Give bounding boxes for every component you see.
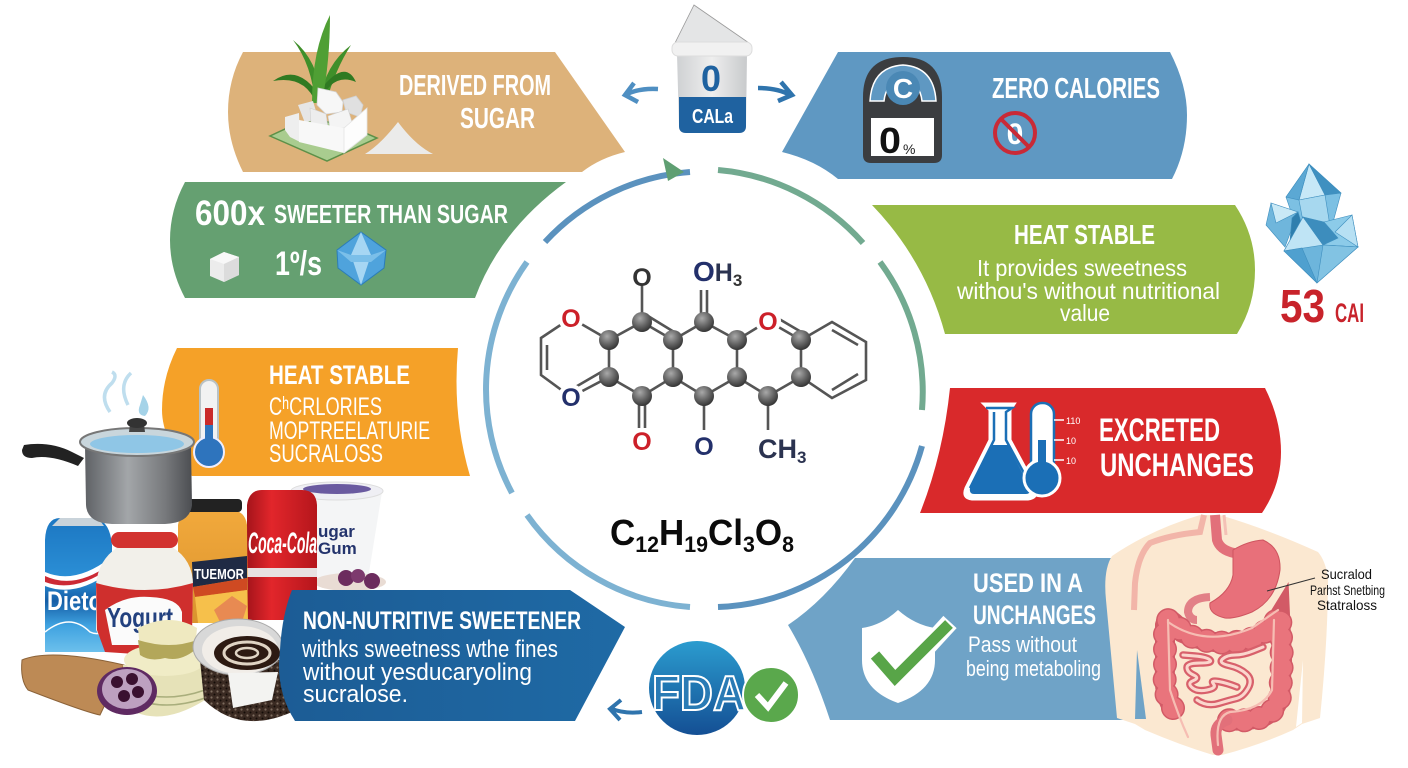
heat stable text block: CʰCRLORIES [269,393,382,421]
passion fruit [97,667,157,715]
text block: non-nutritive body: sucralose. [303,681,408,708]
heading: non-nutritive sweetener: NON-NUTRITIVE SWEETENER [303,607,581,635]
heading: 600x sweeter: 600x [195,194,265,233]
jar: sauce: TUEMOR [194,566,244,583]
chemical structure: O [632,264,652,292]
chemical formula: Cl [708,512,743,553]
chemical formula: H [659,512,684,553]
icon: ice crystals [1266,164,1358,283]
ratio text: 1º/s [275,245,322,283]
panel: non-nutritive sweetener [279,590,625,721]
stomach [1210,540,1280,618]
can: dieto [45,518,112,652]
text block: non-nutritive body: without yesducaryoling [302,659,532,686]
large intestine [1165,610,1282,750]
arrow: to zero calories [758,82,792,101]
text block: pass without: Pass without [968,632,1077,657]
text block: sweetness: It provides sweetness [977,255,1187,281]
chemical formula: 8 [782,532,794,557]
anatomy label [1310,566,1385,613]
text block: sweetness [956,255,1220,326]
can: dieto: Dieto [47,586,102,616]
callout: 53 cal: 53 [1280,280,1325,332]
icon: flask and thermometer: 10 [1066,436,1076,446]
heading: excreted unchanges: EXCRETED [1099,412,1220,448]
text block: non-nutritive body [301,636,558,708]
heading: used in a [973,568,1096,630]
icon: no-calorie sign [995,113,1035,153]
panel: used in a unchanges [788,558,1148,720]
chemical structure: O [694,433,714,461]
tub: sugar gum: ugar [318,522,355,541]
icon: calorie gauge: 0 [879,120,901,161]
icon: FDA badge: FDA [652,667,746,721]
leader line [1267,578,1315,591]
panel: zero calories [782,52,1187,179]
chemical structure: O [561,384,581,412]
chemical structure: O [758,308,778,336]
chemical formula: 12 [635,532,659,557]
heading: heat stable: HEAT STABLE [1014,219,1155,250]
heading: used in a: UNCHANGES [973,600,1096,630]
anatomy label: Statraloss [1317,597,1377,613]
chemical formula: O [755,512,782,553]
icon: calorie gauge [863,57,942,163]
heat stable text block: SUCRALOSS [269,440,383,468]
text block: non-nutritive body: withks sweetness wthe fines [301,636,558,663]
icon: FDA badge [610,641,799,735]
text block: pass without: being metaboling [966,656,1101,681]
icon: sugar plant and cubes [270,15,433,161]
panel: derived from sugar [228,15,625,172]
callout: 53 cal: CAI [1335,298,1364,328]
icon: calorie gauge: C [893,73,913,104]
chemical formula: C [610,512,636,553]
arrow head on ring [663,158,684,181]
panel: heat stable green [872,205,1255,334]
panel: 600x sweeter than sugar [170,182,566,298]
heading: used in a: USED IN A [973,568,1083,598]
panel: heat stable orange [162,348,470,476]
icon: flask and thermometer: 10 [1066,456,1076,466]
tub: sugar gum: Gum [318,539,357,558]
heading: derived from sugar: DERIVED FROM [399,70,551,102]
heading: derived from sugar [399,70,551,135]
heat stable heading: HEAT STABLE [269,360,410,390]
icon: sugar cup with arrows: 0 [701,58,721,99]
icon: blue diamond [337,232,386,285]
icon: sugar cube [210,252,239,282]
panel: excreted unchanges [920,388,1281,513]
chemical structure [541,256,866,467]
heading: 600x sweeter: SWEETER THAN SUGAR [274,199,508,229]
chemical formula: 3 [743,532,755,557]
heading: excreted unchanges [1099,412,1254,483]
anatomy label: Sucralod [1321,566,1372,582]
icon: flask and thermometer [965,403,1080,499]
arrow: to derived panel [625,83,658,102]
heat stable text block: MOPTREELATURIE [269,417,430,445]
jar: sauce [178,499,248,623]
icon: food products group: Coca-Cola [248,527,317,560]
icon: no-calorie sign: 0 [1007,118,1023,151]
icon: calorie gauge: % [903,141,915,157]
chemical structure: O [561,305,581,333]
heading: zero calories: ZERO CALORIES [992,73,1160,105]
text block: sweetness: value [1060,300,1110,326]
tub: sugar gum [291,482,386,591]
text block: pass without [966,632,1101,681]
chemical structure: O [632,428,652,456]
icon: thermometer [194,380,224,467]
chemical structure: 3 [797,448,806,467]
text block: sweetness: withou's without nutritional [956,278,1220,304]
heat stable text block [269,393,430,468]
chemical structure: CH [758,434,797,464]
chemical formula: 19 [684,532,708,557]
bread slice [22,655,124,715]
icon: shield with check [862,610,950,703]
small intestine [1183,647,1263,705]
icon: sugar cup with arrows: CALa [692,106,734,128]
can: cola [247,490,317,620]
heading: 600x sweeter [195,194,508,233]
heading: excreted unchanges: UNCHANGES [1100,447,1254,483]
chocolate cup [193,619,292,721]
pot and steam [22,372,194,524]
icon: sugar cup with arrows [625,5,792,133]
heading: derived from sugar: SUGAR [460,103,535,135]
chemical structure: 3 [733,271,742,290]
anatomy label: Parhst Snetbing [1310,582,1385,598]
custard bowl [123,620,206,716]
jar: yogurt: Yogurt [107,602,173,633]
chemical structure: OH [693,256,733,287]
icon: food products group [22,372,386,721]
callout: 53 cal [1280,280,1364,332]
ring around molecule [486,158,923,607]
illustration: digestive system [1105,515,1385,755]
jar: yogurt [96,532,193,655]
icon: flask and thermometer: 110 [1066,416,1080,426]
